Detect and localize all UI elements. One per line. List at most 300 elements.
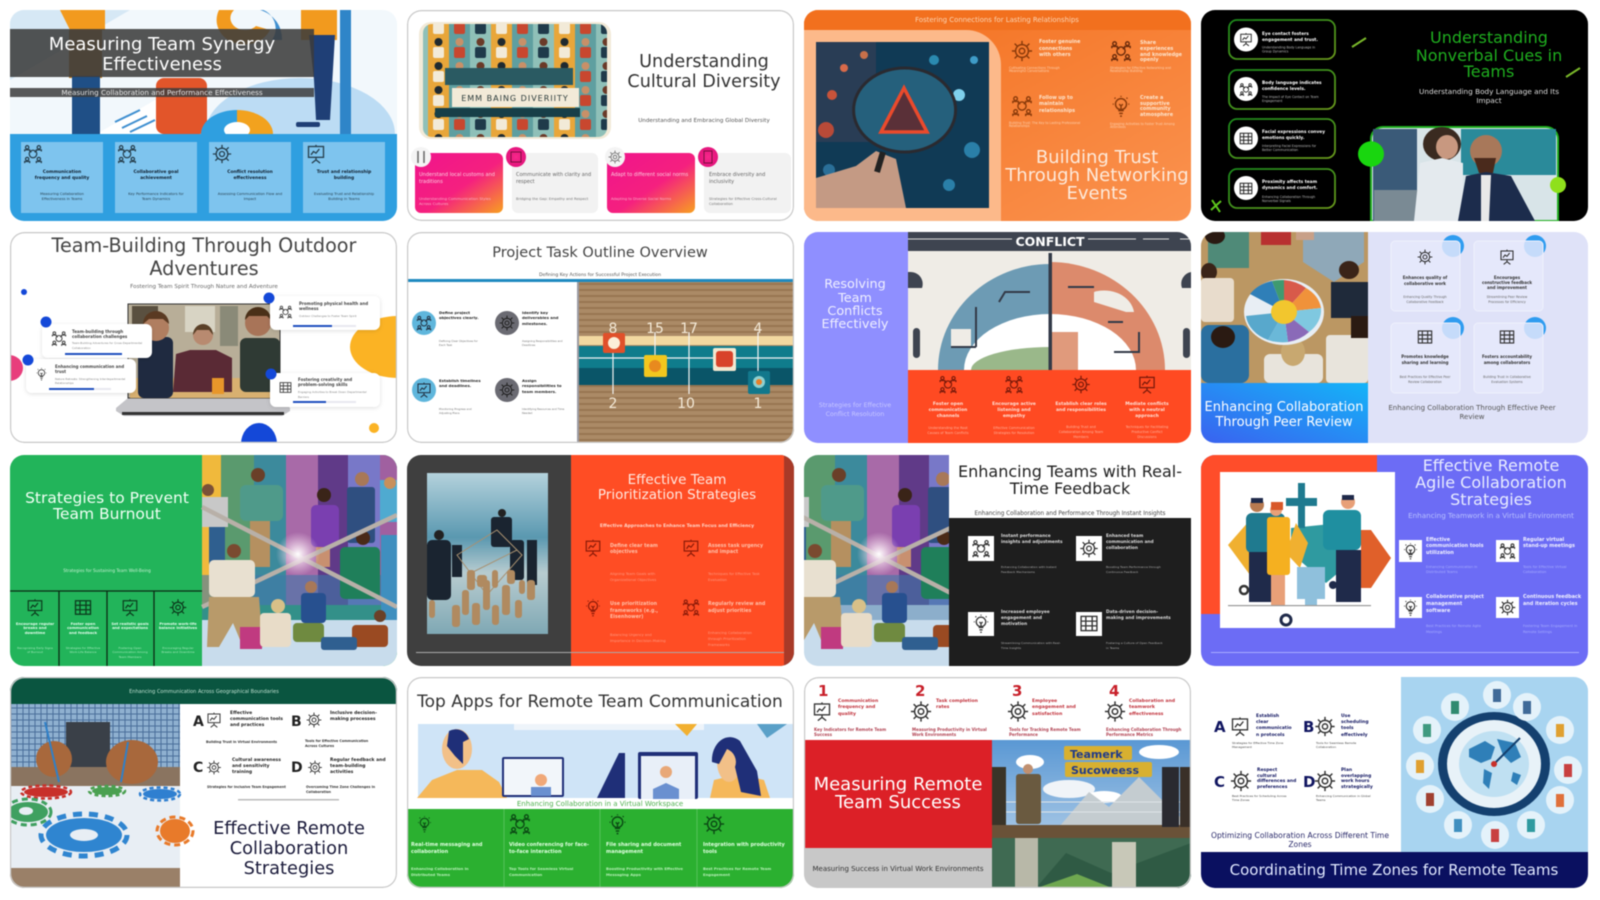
benefit: instant insights (968, 533, 1063, 574)
item D: Plan (1341, 767, 1352, 773)
strategy: frameworks: Importance in Decision-Making (610, 639, 666, 643)
item A: clear (1256, 719, 1269, 725)
strategies strip: approach (1135, 413, 1159, 419)
item B (1303, 713, 1369, 749)
panel: Understanding Nonverbal Cues in Teams (1201, 10, 1588, 221)
task: define objectives: objectives clearly. (439, 315, 479, 320)
tip card: clarity: Bridging the Gap: Empathy and Respect (516, 197, 589, 201)
strategy: review: Frameworks (708, 643, 730, 647)
tip card: clarity: respect (516, 179, 535, 185)
strategy: frameworks: Eisenhower) (610, 614, 643, 620)
timeline image: 1 (754, 396, 762, 412)
metric card: communication: Effectiveness in Teams (42, 197, 83, 201)
task: responsibilities (495, 378, 565, 415)
task: deliverables: deliverables and (522, 315, 559, 320)
metric card: goals: Collaborative goal (133, 169, 179, 175)
item D: activities (330, 769, 354, 775)
benefit: data-driven: making and improvements (1106, 615, 1171, 621)
review card: knowledge (1391, 317, 1464, 393)
review card: knowledge: Promotes knowledge (1401, 354, 1449, 359)
laptop photo (116, 304, 290, 416)
metric 4: effectiveness (1129, 711, 1164, 717)
title: Strategies (244, 858, 334, 879)
item B: effectively (1341, 732, 1368, 738)
item A: and practices (230, 722, 265, 728)
photo: bridge and mountains (992, 740, 1191, 888)
title: Events (1067, 183, 1127, 204)
panel: Effective Team Prioritization Strategies (407, 455, 794, 666)
item: share experiences: and knowledge (1140, 52, 1183, 58)
strategies strip: Establish clear roles (1055, 401, 1107, 407)
title block (804, 740, 992, 848)
strategies grid: Team Members (118, 655, 142, 659)
heading strip text: Fostering Connections for Lasting Relationships (915, 16, 1079, 24)
item B: B (291, 714, 302, 730)
item D (1303, 767, 1373, 802)
decorative shapes (10, 288, 397, 443)
metric 3: 3 (1012, 682, 1022, 700)
metric 2 (911, 682, 987, 737)
task: responsibilities: Assign (522, 378, 537, 383)
panel: Effective Remote Collaboration Strategies (5, 677, 397, 888)
item: community: community (1140, 106, 1171, 112)
item A: Management (1232, 745, 1253, 749)
strategy: frameworks: Use prioritization (610, 601, 658, 607)
item B: making processes (330, 716, 376, 722)
photo: magnifier over warning sign (816, 42, 989, 208)
item D: Regular feedback and (330, 757, 386, 763)
cue: body language (1229, 70, 1335, 109)
photo: team around wheel (1201, 228, 1368, 383)
item B: Collaboration (1316, 745, 1336, 749)
title: Cultural Diversity (627, 72, 781, 92)
item: community: Engaging Activities to Foster Trust Among (1110, 122, 1175, 126)
strategies grid: Encouraging Regular (162, 646, 194, 650)
item: community: supportive (1140, 101, 1170, 107)
metric 1 (814, 682, 886, 737)
item C: differences and (1257, 778, 1296, 784)
metric card: communication: Measuring Collaboration (40, 192, 84, 196)
subtitle: Review (1460, 413, 1485, 421)
benefit card: challenges (40, 316, 152, 358)
metric 4: Performance Metrics (1106, 732, 1154, 737)
strategies strip: Building Trust and (1066, 425, 1096, 429)
timeline image (579, 282, 794, 443)
title: Understanding (1430, 28, 1548, 47)
item D: strategically (1341, 784, 1373, 790)
timeline image: 8 (609, 321, 617, 337)
metric 1: 1 (818, 682, 828, 700)
task: responsibilities: team members. (522, 389, 557, 394)
green features panel: Enhancing Collaboration in (411, 866, 469, 871)
review card: feedback: Streamlining Peer Review (1487, 295, 1528, 299)
item A: Effective (230, 710, 252, 716)
strategies strip: Encourage active (992, 401, 1036, 407)
cue: facial expressions: Facial expressions convey (1262, 129, 1325, 135)
tip card: inclusivity: Collaboration (709, 202, 733, 206)
strategies grid: Encourage regular (16, 622, 54, 626)
strategy: feedback cycles: and iteration cycles (1523, 601, 1578, 607)
task: timelines: and deadlines. (439, 383, 472, 388)
item D: overlapping (1341, 773, 1371, 779)
benefit: engagement: motivation (1001, 621, 1027, 627)
strategy: stand-ups: Collaboration (1523, 570, 1546, 574)
strategies grid: Foster open (71, 622, 96, 626)
green features panel: Integration with productivity (703, 842, 786, 848)
subtitle: Effective Approaches to Enhance Team Focus and Efficiency (600, 523, 754, 529)
benefit: engagement: Streamlining Communication with Real- (1001, 641, 1060, 645)
tip card: customs: Across Cultures (419, 201, 448, 206)
cue: facial expressions (1229, 119, 1335, 158)
tip card: norms (605, 147, 695, 213)
item B: B (1303, 718, 1314, 736)
task: timelines: Adjusting Plans (439, 411, 460, 415)
strategy: urgency: Assess task urgency (708, 543, 764, 549)
review card: accountability: Building Trust in Collaborative (1483, 375, 1531, 379)
metric 4: teamwork (1129, 704, 1156, 710)
item B: scheduling (1341, 719, 1369, 725)
cue: eye contact: Eye contact fosters (1262, 31, 1309, 37)
cue: body language: Engagement (1262, 99, 1283, 103)
panel: Strategies to Prevent Team Burnout (10, 455, 397, 666)
review card: feedback: constructive feedback (1482, 280, 1532, 285)
metric 4: Enhancing Collaboration Through (1106, 727, 1182, 732)
metric 1: Communication (838, 698, 878, 704)
green features panel: management (606, 849, 644, 855)
title: Adventures (149, 257, 259, 280)
strategy: project software: software (1426, 608, 1451, 614)
strategies grid: of Burnout (27, 650, 44, 654)
subtitle: Enhancing Collaboration and Performance Through Instant Insights (975, 511, 1165, 517)
task: responsibilities: Identifying Resources and Time (522, 407, 565, 411)
item D: Enhancing Communication in Global (1316, 794, 1371, 798)
strategy: review: Enhancing Collaboration (708, 631, 752, 635)
subtitle: Strategies for Sustaining Team Well-Being (63, 568, 151, 573)
metric 1: Success (814, 732, 833, 737)
metric 2: rates (936, 704, 950, 710)
blue panel (10, 134, 397, 221)
benefit: team communication: communication and (1106, 539, 1154, 545)
subtitle: Zones (1288, 840, 1312, 849)
strategy: project software: Meetings (1426, 630, 1442, 634)
strategy: objectives: Define clear team (610, 543, 658, 549)
benefit: team communication: Boosting Team Performance through (1106, 565, 1161, 569)
strategy: frameworks: frameworks (e.g., (610, 608, 658, 614)
metric 1: Key Indicators for Remote Team (814, 727, 886, 732)
strategy: objectives: Organizational Objectives (610, 578, 656, 582)
item: follow up: Relationships (1009, 124, 1030, 128)
strategies grid: Breaks and Downtime (161, 650, 195, 654)
item: follow up: relationships (1039, 108, 1075, 114)
benefit card: communication: Enhancing communication and (55, 364, 124, 369)
strategy: feedback cycles: Fostering Team Engagement in (1523, 624, 1577, 628)
metric card: trust: Evaluating Trust and Relationship (314, 192, 375, 196)
item: share experiences: openly (1140, 57, 1159, 63)
item A: Building Trust in Virtual Environments (206, 740, 277, 744)
item: genuine connections: with others (1039, 52, 1071, 58)
item: share experiences (1110, 40, 1183, 73)
benefit: engagement: Increased employee (1001, 609, 1050, 615)
item A: Strategies for Effective Time Zone (1232, 741, 1283, 745)
metric card: trust: Trust and relationship (317, 169, 371, 175)
metric 4 (1105, 682, 1182, 737)
item D: D (291, 760, 303, 776)
benefit card: creativity: Fostering creativity and (298, 377, 352, 382)
cue: facial expressions: Interpreting Facial Expressions for (1262, 144, 1317, 148)
green features panel: Messaging Apps (606, 872, 642, 877)
item: share experiences: Strategies for Effective Networking and (1110, 66, 1171, 70)
item: genuine connections: Cultivating Connections Through (1009, 66, 1060, 70)
metric card: conflict: effectiveness (234, 175, 267, 181)
title band (1201, 852, 1588, 888)
tip card: norms: Adapting to Diverse Social Norms (611, 197, 671, 201)
task: deliverables: milestones. (522, 321, 548, 326)
benefit: instant insights: Feedback Mechanisms (1001, 570, 1035, 574)
strategy: objectives (586, 540, 658, 582)
tip card: clarity (506, 147, 598, 213)
metric card: trust: building (334, 175, 354, 181)
strategies strip: Strategies for Resolution (994, 431, 1034, 435)
strategy: urgency: Evaluation (708, 578, 727, 582)
green features panel: Boosting Productivity with Effective (606, 866, 683, 871)
metric 3: Performance (1009, 732, 1038, 737)
task: define objectives: Define project (439, 310, 470, 315)
illustration: diversity mosaic: EMM BAING DIVERIITY (461, 94, 569, 103)
cue: facial expressions: emotions quickly. (1262, 135, 1305, 141)
cue: body language: The Impact of Eye Contact on Team (1261, 95, 1319, 99)
metric card: goals: Key Performance Indicators for (128, 192, 184, 196)
metric card: trust (303, 142, 385, 213)
benefit card: creativity: problem-solving skills (298, 382, 348, 387)
title: Measuring Team Synergy (49, 34, 276, 55)
tip card: clarity: Communicate with clarity and (516, 172, 591, 178)
band text: Enhancing Communication Across Geographical Boundaries (129, 689, 279, 695)
item: community: Create a (1140, 95, 1163, 101)
review card: accountability (1474, 317, 1546, 393)
strategies strip: Mediate conflicts (1125, 401, 1169, 407)
item A (1214, 713, 1292, 749)
cue: proximity: Nonverbal Signals (1262, 199, 1291, 203)
tip card: norms: Adapt to different social norms (611, 172, 689, 178)
strategies grid: downtime (25, 631, 46, 635)
item C: Respect (1257, 767, 1278, 773)
item A: Establish (1256, 713, 1279, 719)
item C: and sensitivity (232, 763, 270, 769)
item C: Strategies for Inclusive Team Engagement (207, 785, 286, 789)
photo: team in network (427, 473, 548, 634)
item: follow up (1009, 95, 1080, 128)
benefit card: health: Outdoor Challenges to Foster Team Spirit (299, 314, 357, 318)
metric 2: 2 (915, 682, 925, 700)
cue: eye contact: Group Dynamics (1262, 50, 1289, 54)
strategy: frameworks (586, 599, 666, 643)
strategies strip: listening and (997, 407, 1031, 413)
strategies strip: Causes of Team Conflicts (927, 431, 969, 435)
strategies grid: communication (67, 626, 99, 630)
illustration: split head conflict (908, 232, 1191, 426)
panel: Measuring Team Synergy Effectiveness (10, 8, 397, 221)
item A: A (193, 714, 204, 730)
subtitle: Understanding Body Language and Its (1419, 87, 1559, 96)
panel: Team-Building Through Outdoor Adventures (10, 232, 398, 444)
metric card: conflict: Assessing Communication Flow and (218, 192, 282, 196)
metric 3 (1008, 682, 1081, 737)
item C: Best Practices for Scheduling Across (1232, 794, 1287, 798)
panel: Building Trust Through Networking Events (804, 10, 1191, 221)
item: genuine connections: Foster genuine (1039, 39, 1081, 45)
task: responsibilities: responsibilities to (522, 383, 562, 388)
item B: Tools for Effective Communication (305, 739, 369, 743)
timeline image: 17 (680, 321, 698, 337)
title: Conflicts (827, 304, 883, 319)
green features panel: Real-time messaging and (411, 842, 483, 848)
photo: colleagues at a screen (1371, 127, 1558, 221)
subtitle: Enhancing Teamwork in a Virtual Environment (1408, 511, 1574, 520)
title: Effective Remote (1423, 456, 1559, 475)
strategies strip: and responsibilities (1056, 407, 1106, 413)
strategies strip: Members (1073, 435, 1089, 439)
subtitle: Fostering Team Spirit Through Nature and Adventure (130, 284, 278, 290)
strategy: objectives: Aligning Team Goals with (610, 572, 655, 576)
review card: quality: collaborative work (1404, 281, 1446, 286)
item B: Inclusive decision- (330, 710, 377, 716)
item: share experiences: experiences (1140, 46, 1173, 52)
strategies grid: and expectations (112, 626, 149, 630)
item C: Time Zones (1231, 798, 1250, 802)
title: Top Apps for Remote Team Communication (416, 692, 783, 712)
tip card: customs: Understand local customs and (419, 172, 495, 178)
green features panel (407, 809, 794, 888)
title: Time Feedback (1009, 479, 1131, 498)
title block: Enhancing Collaboration (1205, 400, 1363, 415)
item: community (1110, 95, 1175, 129)
illustration: handshake team (1220, 472, 1395, 628)
subtitle: Measuring Collaboration and Performance Effectiveness (61, 88, 263, 97)
strategy: stand-ups: Tools for Effective Virtual (1522, 565, 1567, 569)
strategy: project software (1399, 594, 1485, 634)
strategy: feedback cycles: Continuous feedback (1523, 594, 1582, 600)
panel: Top Apps for Remote Team Communication (407, 677, 794, 888)
tip card: customs: Understanding Communication Styles (419, 196, 491, 201)
cue: body language: Body language indicates (1262, 80, 1322, 86)
photo: tangled team (202, 455, 397, 666)
title block: Measuring Remote (814, 774, 982, 795)
item A: n protocols (1256, 732, 1285, 738)
item D: team-building (330, 763, 366, 769)
strategies strip: channels (937, 413, 960, 419)
timeline image: 4 (754, 321, 763, 337)
strategies grid: Work-Life Balance (69, 650, 97, 654)
title: Understanding (639, 52, 769, 72)
strategies grid: balance initiatives (159, 626, 198, 630)
benefit card: communication: Relationships (55, 381, 74, 385)
metric card: communication: Communication (43, 169, 81, 175)
title: Effectively (822, 317, 889, 332)
strategies grid: and feedback (69, 631, 98, 635)
review card: feedback: and improvement (1487, 285, 1527, 290)
item C: preferences (1257, 784, 1288, 790)
task: define objectives: Defining Clear Objectives for (439, 339, 479, 343)
item B: Across Cultures (305, 744, 334, 748)
strategies grid: Recognizing Early Signs (17, 646, 53, 650)
strategies grid: Strategies for Effective (66, 646, 100, 650)
metric 3: engagement and (1032, 704, 1076, 710)
item A: communication tools (230, 716, 283, 722)
benefit: data-driven (1076, 609, 1171, 650)
benefit: engagement: engagement and (1001, 615, 1042, 621)
metric 4: 4 (1109, 682, 1119, 700)
review card: feedback (1474, 235, 1546, 311)
green features panel: tools (703, 849, 717, 855)
benefit card: communication: Nature Retreats: Strengthening Interdepartmental (55, 377, 125, 381)
subtitle: Understanding and Embracing Global Diversity (638, 118, 770, 124)
strategy: stand-ups: stand-up meetings (1523, 543, 1575, 549)
item: community: atmosphere (1140, 112, 1174, 118)
item: share experiences: Share (1140, 40, 1157, 46)
panel: Enhancing Collaboration Through Peer Review (1201, 228, 1588, 443)
green features panel: File sharing and document (606, 842, 682, 848)
metric card: communication (21, 142, 103, 213)
benefit: instant insights: insights and adjustments (1001, 539, 1063, 545)
panel: Effective Remote Agile Collaboration Strategies (1201, 455, 1588, 666)
cue: proximity: Proximity affects team (1262, 179, 1318, 185)
review card: quality: Enhancing Quality Through (1403, 295, 1447, 299)
cue: eye contact: engagement and trust. (1262, 37, 1318, 43)
review card: knowledge: sharing and learning (1402, 360, 1449, 365)
benefit card: creativity: Barriers (298, 395, 310, 399)
task: timelines (412, 378, 481, 415)
metric card: trust: Building in Teams (328, 197, 360, 201)
strategies grid: breaks and (23, 626, 47, 630)
benefit: engagement (968, 609, 1060, 650)
cue: proximity (1229, 169, 1335, 208)
benefit: instant insights: Enhancing Collaboration with Instant (1001, 565, 1057, 569)
metric card: goals (115, 142, 197, 213)
panel: Project Task Outline Overview (407, 232, 794, 443)
title: Team-Building Through Outdoor (51, 234, 357, 257)
benefit: team communication (1076, 533, 1161, 574)
accent dots and marks (1211, 38, 1580, 212)
green features panel: Best Practices for Remote Team (703, 866, 771, 871)
benefit card: health (264, 292, 380, 330)
item A: A (1214, 718, 1226, 736)
title block (1201, 383, 1368, 443)
strategy: tools: Distributed Teams (1426, 570, 1458, 574)
subtitle block (804, 848, 992, 888)
illustration: team analysing charts (10, 9, 396, 135)
metric 2: Task completion (936, 698, 978, 704)
cue: eye contact: Understanding Body Language in (1262, 46, 1315, 50)
benefit card: challenges: Collaboration (72, 346, 91, 350)
item: share experiences: Relationship Building (1110, 69, 1143, 73)
strategy: project software: management (1426, 601, 1463, 607)
metric 3: Tools for Tracking Remote Team (1009, 727, 1081, 732)
strategy: tools: Effective (1426, 537, 1451, 543)
strategy: tools: utilization (1426, 550, 1454, 556)
tip card: inclusivity: Strategies for Effective Cross-Cultural (709, 197, 777, 201)
strategies strip: empathy (1003, 413, 1025, 419)
benefit card: creativity: Engaging Activities to Break Down Departmental (298, 390, 367, 394)
item A: communicatio (1256, 725, 1292, 731)
strategies strip: Collaboration Among Team (1059, 430, 1103, 434)
metric card: conflict (209, 142, 291, 213)
timeline image: 10 (677, 396, 695, 412)
timeline image: 15 (646, 321, 664, 337)
green features panel: collaboration (411, 849, 449, 855)
subtitle: Strategies for Effective (819, 402, 891, 409)
title: Project Task Outline Overview (492, 245, 708, 261)
subtitle block: Measuring Success in Virtual Work Environments (812, 865, 984, 873)
